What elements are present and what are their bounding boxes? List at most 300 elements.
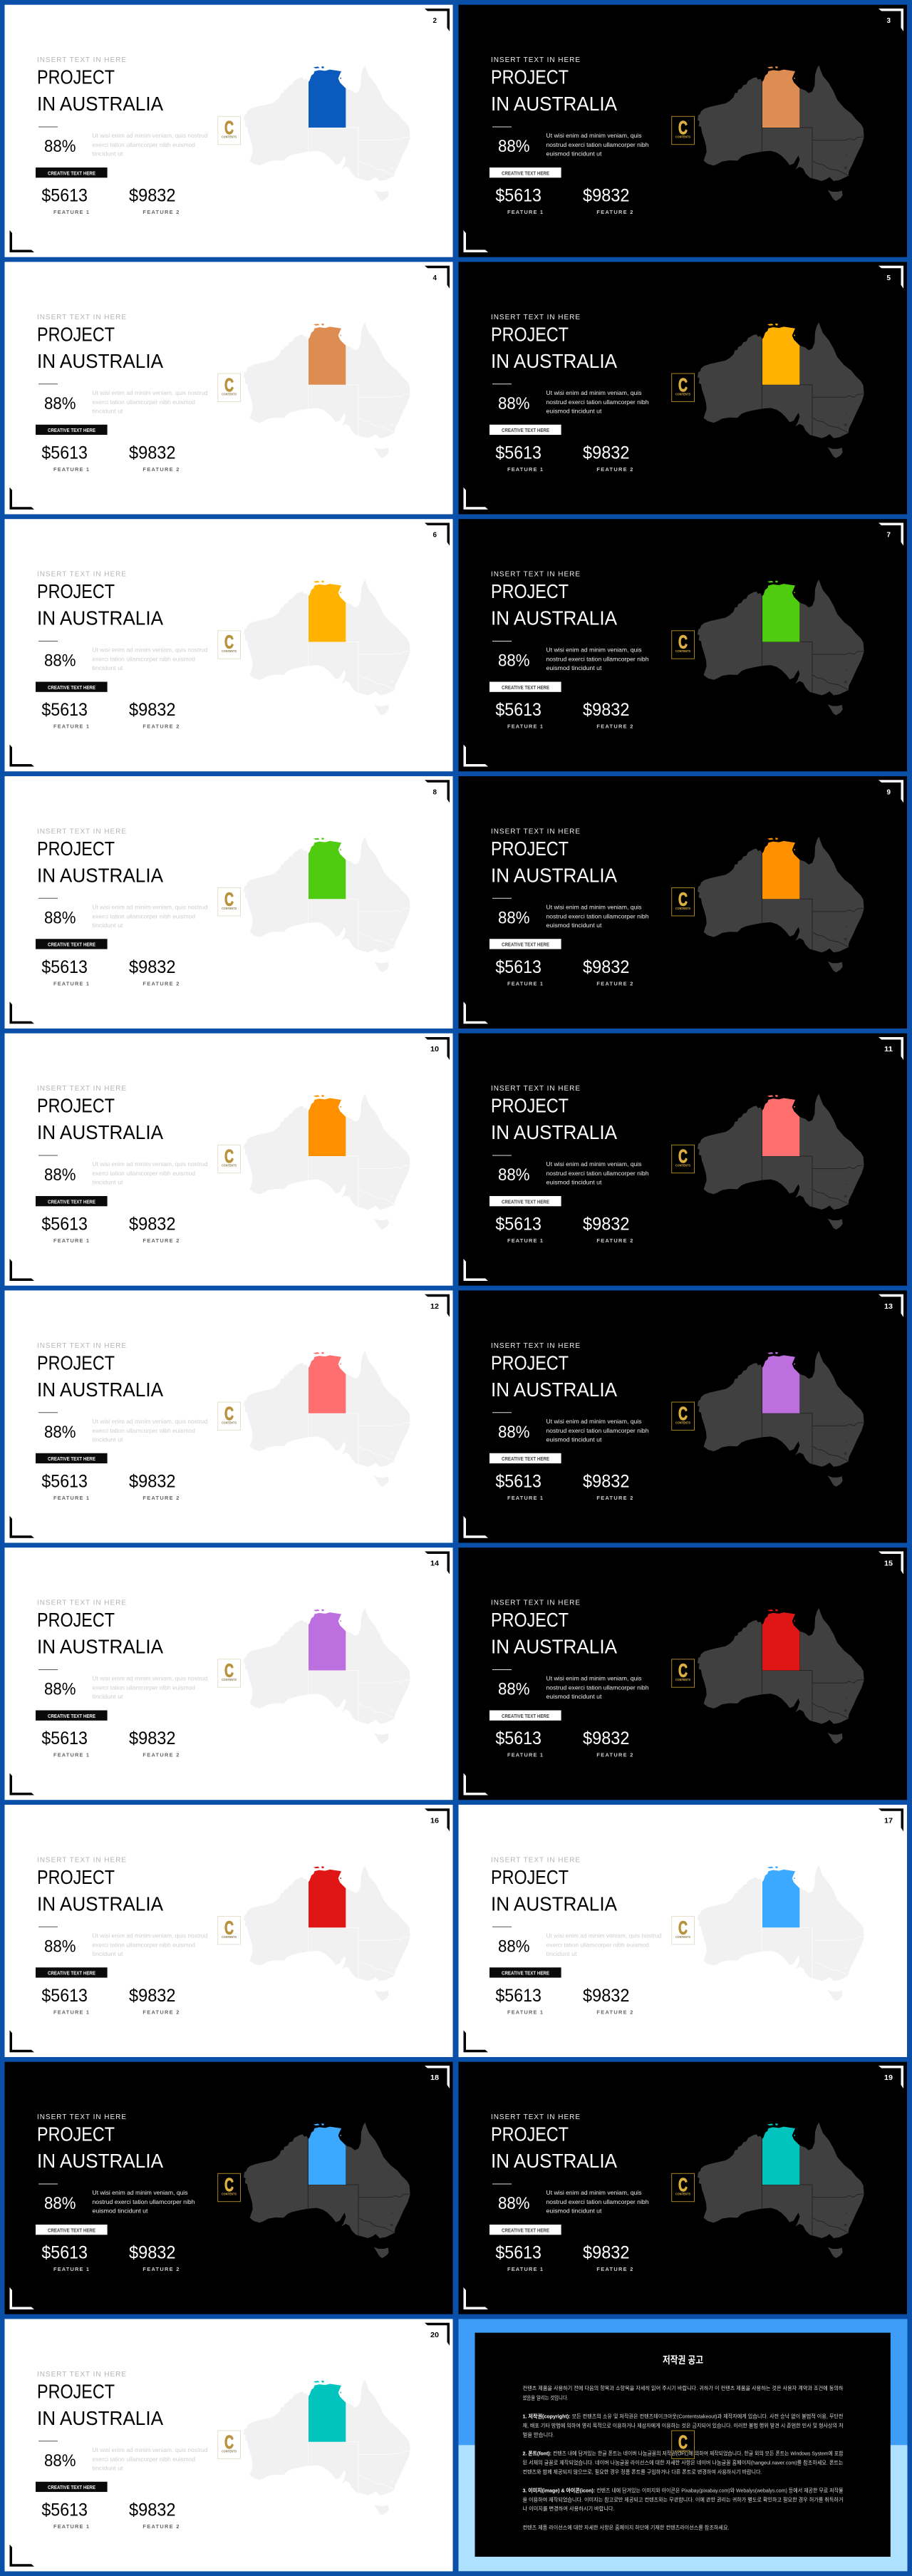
map of Australia with Northern Territory highlighted	[244, 322, 410, 458]
corner bracket top right	[425, 1808, 450, 1831]
feature labels	[53, 209, 179, 215]
logo: C	[224, 1917, 234, 1938]
stat: 88%: 88%	[498, 1679, 530, 1699]
title: PROJECT	[491, 323, 569, 345]
button: CREATIVE TEXT HERE	[502, 170, 549, 176]
eyebrow: INSERT TEXT IN HERE	[491, 570, 580, 579]
body text	[546, 1160, 649, 1186]
logo: CONTENTS	[222, 649, 237, 653]
price values	[41, 186, 176, 206]
panel: slide 5	[459, 262, 907, 514]
title	[37, 2380, 163, 2429]
body text: euismod tincidunt ut	[546, 1179, 602, 1186]
logo: CONTENTS	[222, 907, 237, 910]
price values: $9832	[583, 1471, 630, 1491]
panel: slide 11	[459, 1034, 907, 1286]
corner bracket bottom left	[10, 744, 34, 767]
corner bracket top right	[879, 1808, 903, 1831]
corner bracket bottom left	[463, 1001, 488, 1024]
button	[489, 2184, 561, 2235]
corner bracket top right	[425, 266, 450, 289]
title	[491, 1095, 617, 1143]
price values: $9832	[129, 1215, 175, 1235]
map of Australia with Northern Territory highlighted	[244, 66, 410, 201]
title	[491, 323, 617, 372]
price values	[495, 1729, 630, 1748]
button	[36, 1412, 108, 1463]
body text: euismod tincidunt ut	[546, 1436, 602, 1443]
page number: 14	[430, 1560, 439, 1568]
map of Australia with Northern Territory highlighted	[698, 66, 864, 201]
body text: Ut wisi enim ad minim veniam, quis nostrud	[93, 1418, 208, 1425]
logo: CONTENTS	[222, 135, 237, 139]
logo: C	[678, 632, 688, 653]
body text	[546, 132, 649, 157]
logo: C	[224, 888, 234, 910]
map of Australia with Northern Territory highlighted	[244, 837, 410, 972]
feature labels: FEATURE 2	[596, 1495, 633, 1501]
section 3: image and icon: 을 이용하여 제작되었습니다. 이미지는 참고로만 제공되고 컨텐츠와는 무관합니다. 이에 관한 권리는 귀하가 별도로 확인하고 필요한 경우 허가를 취득하거	[523, 2496, 844, 2503]
title: IN AUSTRALIA	[37, 1121, 163, 1143]
feature labels	[53, 2009, 179, 2015]
slide background	[4, 2319, 453, 2571]
feature labels	[507, 723, 633, 730]
stat: 88%: 88%	[44, 1165, 76, 1185]
logo: CONTENTS	[222, 392, 237, 396]
logo	[218, 2173, 241, 2202]
logo: CONTENTS	[675, 2449, 690, 2453]
logo: CONTENTS	[675, 649, 690, 653]
feature labels: FEATURE 2	[596, 2009, 633, 2015]
feature labels: FEATURE 2	[142, 2266, 179, 2272]
corner bracket bottom left	[10, 488, 34, 510]
title: PROJECT	[37, 66, 115, 88]
button: CREATIVE TEXT HERE	[502, 427, 549, 433]
logo	[672, 1659, 694, 1687]
price values: $5613	[495, 186, 542, 206]
eyebrow: INSERT TEXT IN HERE	[37, 1085, 126, 1093]
button	[36, 2184, 108, 2235]
body text	[546, 1675, 649, 1700]
price values: $5613	[41, 700, 88, 720]
slide background	[4, 1547, 453, 1800]
stat: 88%: 88%	[498, 1937, 530, 1956]
price values: $9832	[583, 186, 630, 206]
body text: tincidunt ut	[546, 1950, 577, 1957]
map of Australia with Northern Territory highlighted	[698, 1351, 864, 1487]
logo: CONTENTS	[222, 2193, 237, 2196]
two-tone blue background	[459, 2319, 908, 2571]
body text: Ut wisi enim ad minim veniam, quis nostrud	[93, 1675, 208, 1682]
map of Australia with Northern Territory highlighted	[698, 1865, 864, 2001]
section 1: copyright: 벌을 받습니다.	[523, 2431, 554, 2438]
corner bracket top right	[879, 1037, 903, 1060]
body text: tincidunt ut	[93, 664, 123, 671]
logo	[672, 631, 694, 659]
body text: Ut wisi enim ad minim veniam, quis	[546, 1675, 641, 1682]
button	[489, 1669, 561, 1721]
price values	[495, 1471, 630, 1491]
feature labels: FEATURE 2	[142, 1495, 179, 1501]
title	[491, 2123, 617, 2172]
map of Australia with Northern Territory highlighted	[244, 2123, 410, 2258]
map of Australia with Northern Territory highlighted	[698, 1094, 864, 1230]
feature labels	[507, 466, 633, 473]
corner bracket top right	[879, 266, 903, 289]
body text: Ut wisi enim ad minim veniam, quis nostrud	[546, 1932, 662, 1939]
title: PROJECT	[37, 1351, 115, 1374]
body text	[93, 903, 208, 929]
stat: 88%: 88%	[44, 1423, 76, 1442]
feature labels: FEATURE 2	[596, 209, 633, 215]
body text	[546, 2189, 649, 2214]
page number: 18	[430, 2073, 439, 2082]
logo: C	[224, 2431, 234, 2453]
feature labels: FEATURE 2	[596, 2266, 633, 2272]
stat: 88%: 88%	[498, 1423, 530, 1442]
feature labels	[53, 1752, 179, 1758]
button: CREATIVE TEXT HERE	[502, 1713, 549, 1719]
feature labels	[53, 2523, 179, 2530]
map of Australia with Northern Territory highlighted	[244, 1351, 410, 1487]
feature labels	[53, 466, 179, 473]
title: IN AUSTRALIA	[37, 607, 163, 629]
body text: nostrud exerci tation ullamcorper nibh	[546, 398, 649, 406]
title: IN AUSTRALIA	[37, 864, 163, 886]
price values	[495, 957, 630, 977]
feature labels: FEATURE 2	[142, 2009, 179, 2015]
body text: Ut wisi enim ad minim veniam, quis nostrud	[93, 903, 208, 910]
feature labels	[507, 1752, 633, 1758]
button	[489, 898, 561, 949]
button	[36, 127, 108, 177]
price values: $9832	[129, 1729, 175, 1748]
panel: slide 10	[4, 1034, 453, 1286]
map of Australia with Northern Territory highlighted	[244, 1094, 410, 1230]
slide background	[4, 2062, 453, 2314]
title: PROJECT	[491, 838, 569, 860]
feature labels	[53, 1237, 179, 1244]
button: CREATIVE TEXT HERE	[48, 1198, 95, 1205]
logo	[672, 1145, 694, 1173]
panel: slide 9	[459, 776, 907, 1029]
price values	[41, 700, 176, 720]
slide background	[4, 1805, 453, 2057]
button: CREATIVE TEXT HERE	[502, 1198, 549, 1205]
slide background	[4, 1034, 453, 1286]
feature labels: FEATURE 2	[596, 1237, 633, 1244]
price values: $5613	[495, 1471, 542, 1491]
body text: exerci tation ullamcorper nibh euismod	[93, 1684, 195, 1691]
body text	[546, 903, 649, 929]
price values: $5613	[495, 2243, 542, 2263]
price values: $5613	[495, 443, 542, 463]
button	[36, 2441, 108, 2492]
slide background	[459, 519, 907, 771]
intro paragraph: 셨음을 알리는 것입니다.	[523, 2394, 569, 2401]
corner bracket bottom left	[10, 1001, 34, 1024]
notice heading: 저작권 공고	[663, 2354, 703, 2366]
panel: slide 7	[459, 519, 907, 771]
body text: tincidunt ut	[93, 922, 123, 929]
feature labels: FEATURE 1	[53, 2523, 89, 2530]
title	[491, 1866, 617, 1915]
eyebrow: INSERT TEXT IN HERE	[491, 1856, 580, 1864]
feature labels: FEATURE 1	[53, 466, 89, 473]
page number: 9	[886, 788, 891, 796]
eyebrow: INSERT TEXT IN HERE	[491, 56, 580, 64]
logo: C	[224, 1145, 234, 1167]
logo: C	[678, 1917, 688, 1938]
price values: $5613	[41, 1986, 88, 2006]
logo	[672, 888, 694, 916]
logo	[672, 2431, 694, 2458]
feature labels: FEATURE 1	[507, 2266, 543, 2272]
feature labels: FEATURE 1	[53, 1752, 89, 1758]
title	[37, 1351, 163, 1401]
button: CREATIVE TEXT HERE	[48, 1456, 95, 1462]
slide background	[4, 5, 453, 257]
button	[489, 383, 561, 435]
price values: $5613	[495, 957, 542, 977]
body text	[93, 389, 208, 414]
logo	[218, 1145, 241, 1173]
title	[491, 580, 617, 629]
logo: C	[224, 374, 234, 396]
stat: 88%: 88%	[44, 2451, 76, 2471]
logo: C	[224, 117, 234, 138]
title: IN AUSTRALIA	[491, 1892, 617, 1915]
feature labels: FEATURE 2	[596, 980, 633, 986]
eyebrow: INSERT TEXT IN HERE	[37, 314, 126, 321]
page number: 4	[433, 274, 437, 282]
panel: slide 14	[4, 1547, 453, 1800]
title: PROJECT	[491, 2123, 569, 2145]
eyebrow: INSERT TEXT IN HERE	[37, 570, 126, 579]
page number: 17	[884, 1816, 893, 1825]
body text: Ut wisi enim ad minim veniam, quis nostrud	[93, 646, 208, 653]
corner bracket bottom left	[10, 2545, 34, 2567]
logo: CONTENTS	[222, 2449, 237, 2453]
corner bracket bottom left	[463, 230, 488, 252]
stat: 88%: 88%	[44, 651, 76, 670]
feature labels	[507, 980, 633, 986]
panel: slide 8	[4, 776, 453, 1029]
title: IN AUSTRALIA	[491, 1635, 617, 1658]
title	[37, 2123, 163, 2172]
slide background	[459, 1034, 907, 1286]
feature labels	[507, 1495, 633, 1501]
logo: CONTENTS	[675, 1935, 690, 1939]
eyebrow: INSERT TEXT IN HERE	[491, 1599, 580, 1607]
feature labels: FEATURE 1	[53, 723, 89, 730]
page number: 19	[884, 2073, 893, 2082]
feature labels: FEATURE 1	[53, 1495, 89, 1501]
corner bracket top right	[425, 1037, 450, 1060]
feature labels: FEATURE 2	[596, 723, 633, 730]
price values	[495, 443, 630, 463]
price values	[41, 1215, 176, 1235]
price values: $9832	[129, 2500, 175, 2520]
logo: CONTENTS	[675, 1678, 690, 1681]
body text: Ut wisi enim ad minim veniam, quis	[546, 903, 641, 910]
slide background	[459, 776, 907, 1029]
price values	[41, 2500, 176, 2520]
map of Australia with Northern Territory highlighted	[698, 2123, 864, 2258]
slide background	[4, 262, 453, 514]
button: CREATIVE TEXT HERE	[48, 2484, 95, 2490]
body text: nostrud exerci tation ullamcorper nibh	[546, 141, 649, 148]
price values	[41, 443, 176, 463]
corner bracket bottom left	[463, 2287, 488, 2309]
section 2: font: 된 서체의 글꼴로 제작되었습니다. 네이버 나눔글꼴 라이선스에 대한 자세한 사항은 네이버 나눔글꼴 홈페이지(hangeul.naver.com)를 참조하세요. 폰트는	[523, 2459, 844, 2466]
corner bracket bottom left	[10, 1516, 34, 1538]
body text: exerci tation ullamcorper nibh euismod	[546, 1941, 649, 1948]
stat: 88%: 88%	[44, 137, 76, 156]
eyebrow: INSERT TEXT IN HERE	[37, 2371, 126, 2379]
eyebrow: INSERT TEXT IN HERE	[37, 2113, 126, 2121]
body text: tincidunt ut	[93, 1693, 123, 1700]
corner bracket top right	[425, 523, 450, 546]
logo: C	[678, 117, 688, 138]
title: PROJECT	[491, 1095, 569, 1116]
logo: CONTENTS	[675, 392, 690, 396]
logo: C	[678, 1659, 688, 1681]
feature labels: FEATURE 2	[142, 980, 179, 986]
button: CREATIVE TEXT HERE	[502, 1970, 549, 1977]
body text: Ut wisi enim ad minim veniam, quis nostrud	[93, 389, 208, 396]
title	[491, 838, 617, 886]
price values: $9832	[129, 700, 175, 720]
logo: C	[678, 2174, 688, 2195]
logo: C	[224, 1403, 234, 1424]
body text: Ut wisi enim ad minim veniam, quis	[546, 646, 641, 653]
feature labels	[53, 1495, 179, 1501]
body text	[93, 1418, 208, 1443]
price values: $5613	[41, 1729, 88, 1748]
eyebrow: INSERT TEXT IN HERE	[491, 1085, 580, 1093]
feature labels	[507, 2266, 633, 2272]
panel: slide 13	[459, 1290, 907, 1542]
body text	[93, 2446, 208, 2471]
feature labels	[507, 1237, 633, 1244]
slide background	[459, 262, 907, 514]
black notice box	[475, 2333, 891, 2557]
body text	[93, 1675, 208, 1700]
body text: exerci tation ullamcorper nibh euismod	[93, 2456, 195, 2463]
feature labels: FEATURE 1	[507, 980, 543, 986]
body text: nostrud exerci tation ullamcorper nibh	[546, 912, 649, 919]
slide background	[459, 2062, 907, 2314]
stat: 88%: 88%	[44, 394, 76, 413]
title: IN AUSTRALIA	[491, 864, 617, 886]
title: IN AUSTRALIA	[37, 350, 163, 372]
feature labels: FEATURE 1	[507, 1495, 543, 1501]
title: PROJECT	[37, 838, 115, 860]
body text	[93, 132, 208, 157]
panel: slide 6	[4, 519, 453, 771]
price values: $9832	[129, 1986, 175, 2006]
price values	[41, 2243, 176, 2263]
button	[489, 641, 561, 692]
logo: CONTENTS	[675, 2193, 690, 2196]
eyebrow: INSERT TEXT IN HERE	[37, 56, 126, 64]
eyebrow: INSERT TEXT IN HERE	[491, 2113, 580, 2121]
title: PROJECT	[37, 1095, 115, 1116]
corner bracket top right	[879, 523, 903, 546]
feature labels: FEATURE 2	[142, 723, 179, 730]
logo: CONTENTS	[675, 1421, 690, 1424]
title	[37, 1095, 163, 1143]
price values: $5613	[495, 1986, 542, 2006]
button: CREATIVE TEXT HERE	[48, 170, 95, 176]
title: IN AUSTRALIA	[37, 1379, 163, 1401]
price values: $9832	[129, 443, 175, 463]
corner bracket bottom left	[10, 1259, 34, 1281]
panel: slide 2	[4, 5, 453, 257]
title	[37, 1866, 163, 1915]
body text: nostrud exerci tation ullamcorper nibh	[546, 1684, 649, 1691]
feature labels	[507, 209, 633, 215]
logo	[218, 116, 241, 145]
body text: euismod tincidunt ut	[546, 664, 602, 671]
corner bracket bottom left	[10, 2287, 34, 2309]
title: PROJECT	[491, 580, 569, 602]
title: PROJECT	[37, 323, 115, 345]
panel: copyright notice	[459, 2319, 908, 2571]
button: CREATIVE TEXT HERE	[48, 1970, 95, 1977]
logo: C	[224, 1659, 234, 1681]
title: PROJECT	[37, 580, 115, 602]
body text: Ut wisi enim ad minim veniam, quis	[546, 2189, 641, 2196]
button: CREATIVE TEXT HERE	[502, 942, 549, 948]
map of Australia with Northern Territory highlighted	[244, 1608, 410, 1743]
body text: exerci tation ullamcorper nibh euismod	[93, 656, 195, 663]
slide background	[459, 1290, 907, 1542]
price values	[41, 1986, 176, 2006]
slide background	[459, 1547, 907, 1800]
feature labels: FEATURE 2	[596, 466, 633, 473]
stat: 88%: 88%	[44, 908, 76, 927]
panel: slide 4	[4, 262, 453, 514]
body text: nostrud exerci tation ullamcorper nibh	[546, 1427, 649, 1434]
section 3: image and icon: 나 이미지를 변경하여 사용하시기 바랍니다.	[523, 2505, 614, 2512]
corner bracket top right	[425, 9, 450, 31]
body text: euismod tincidunt ut	[546, 150, 602, 157]
section 2: font	[523, 2449, 844, 2475]
logo	[218, 1659, 241, 1687]
slide background	[4, 519, 453, 771]
body text: exerci tation ullamcorper nibh euismod	[93, 1170, 195, 1177]
price values: $9832	[583, 1215, 630, 1235]
price values	[495, 186, 630, 206]
logo: C	[678, 888, 688, 910]
logo: C	[678, 1145, 688, 1167]
body text: exerci tation ullamcorper nibh euismod	[93, 912, 195, 919]
corner bracket bottom left	[463, 488, 488, 510]
corner bracket top right	[425, 1551, 450, 1574]
price values: $5613	[495, 700, 542, 720]
button	[489, 1412, 561, 1463]
body text: exerci tation ullamcorper nibh euismod	[93, 1427, 195, 1434]
page number: 12	[430, 1302, 439, 1311]
button	[36, 1927, 108, 1978]
body text: exerci tation ullamcorper nibh euismod	[93, 1941, 195, 1948]
corner bracket top right	[879, 1294, 903, 1317]
body text: tincidunt ut	[93, 1179, 123, 1186]
body text: Ut wisi enim ad minim veniam, quis	[93, 2189, 188, 2196]
slide background	[459, 1805, 907, 2057]
